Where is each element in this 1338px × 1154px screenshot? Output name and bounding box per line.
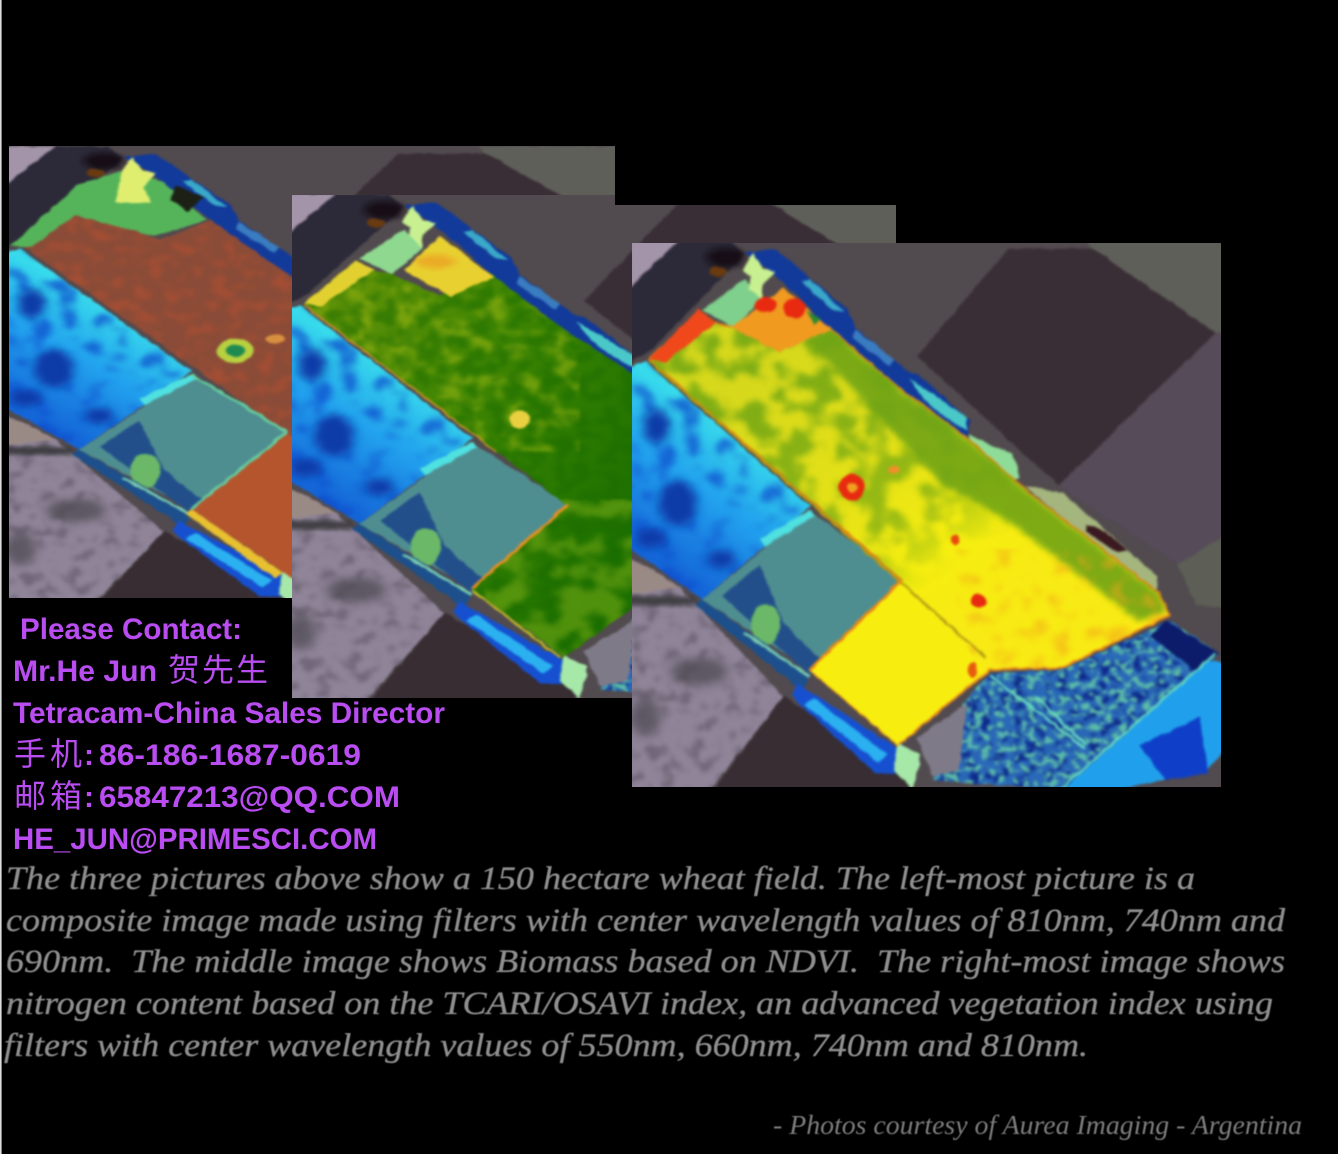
contact details: 邮箱 [14, 771, 82, 817]
photo credit: - Photos courtesy of Aurea Imaging - Argentina [773, 1110, 1302, 1140]
contact details: Tetracam-China Sales Director [13, 697, 445, 730]
image: middle NDVI biomass picture [292, 195, 896, 698]
contact details: 贺先生 [168, 645, 268, 691]
contact details: 86-186-1687-0619 [99, 739, 361, 772]
description paragraph: filters with center wavelength values of 550nm, 660nm, 740nm and 810nm. [4, 1028, 1088, 1064]
description paragraph: nitrogen content based on the TCARI/OSAVI index, an advanced vegetation index using [6, 986, 1273, 1022]
contact details: : [84, 739, 94, 772]
contact details: Please Contact: [20, 613, 242, 646]
contact details: 手机 [14, 729, 82, 775]
image: left composite picture [9, 146, 615, 598]
contact details [13, 613, 445, 856]
description paragraph: composite image made using filters with center wavelength values of 810nm, 740nm and [6, 903, 1286, 939]
description paragraph: The three pictures above show a 150 hectare wheat field. The left-most picture is a [6, 861, 1195, 897]
description paragraph: 690nm. The middle image shows Biomass based on NDVI. The right-most image shows [6, 944, 1285, 980]
contact details: Mr.He Jun [13, 655, 157, 688]
contact details: : [84, 781, 94, 814]
contact details: HE_JUN@PRIMESCI.COM [13, 823, 377, 856]
contact details: 65847213@QQ.COM [99, 781, 400, 814]
image: right nitrogen content picture [632, 243, 1221, 787]
description paragraph [4, 861, 1286, 1064]
